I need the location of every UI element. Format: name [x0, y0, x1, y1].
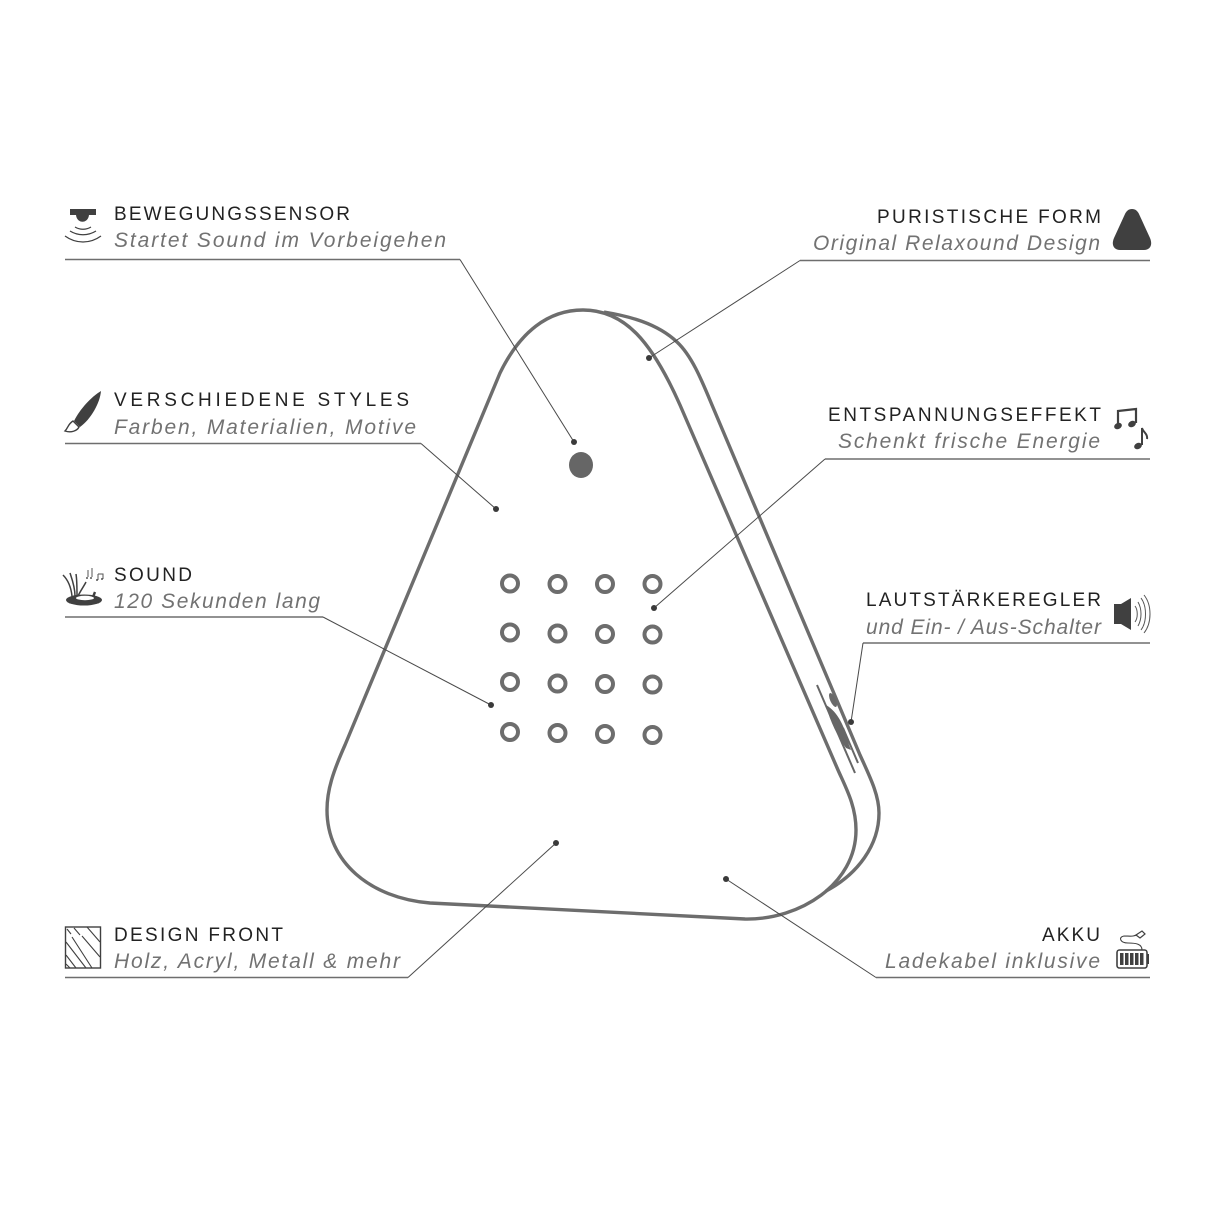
speaker holes [502, 576, 660, 743]
description: Schenkt frische Energie [838, 430, 1100, 453]
description: und Ein- / Aus-Schalter [866, 616, 1102, 639]
heading: VERSCHIEDENE STYLES [114, 390, 409, 411]
heading: DESIGN FRONT [114, 925, 283, 946]
device illustration [327, 310, 879, 919]
heading: PURISTISCHE FORM [877, 207, 1101, 228]
heading: LAUTSTÄRKEREGLER [866, 590, 1101, 611]
icon: hatched material square [66, 927, 100, 968]
volume control [817, 685, 858, 773]
heading: BEWEGUNGSSENSOR [114, 204, 350, 225]
device back edge [604, 312, 879, 891]
icon: speaker [1114, 595, 1150, 633]
leader line [65, 442, 421, 444]
icon: triangle shape [1113, 209, 1151, 250]
icon: music notes [1113, 409, 1147, 450]
icon: pond with record and notes [63, 568, 103, 606]
heading: SOUND [114, 565, 192, 586]
callout: Puristische Form [646, 207, 1151, 361]
leader line [876, 976, 1150, 978]
motion sensor window [569, 452, 593, 478]
leader line [800, 260, 1150, 262]
icon: paint brush [65, 391, 101, 432]
icon: battery with charging cable [1117, 931, 1149, 968]
leader line [825, 458, 1150, 460]
callout: Lautstärkeregler [848, 590, 1150, 725]
icon: motion sensor [65, 209, 101, 242]
leader line [65, 258, 460, 260]
callout: Sound [63, 565, 494, 708]
callout: Bewegungssensor [65, 204, 577, 445]
description: Holz, Acryl, Metall & mehr [114, 950, 401, 973]
leader line [65, 976, 408, 978]
heading: AKKU [1042, 925, 1100, 946]
callout: Entspannungseffekt [651, 405, 1150, 611]
description: 120 Sekunden lang [114, 590, 320, 613]
leader line [863, 642, 1150, 644]
description: Startet Sound im Vorbeigehen [114, 229, 446, 252]
callout: Verschiedene Styles [65, 390, 499, 512]
description: Ladekabel inklusive [885, 950, 1100, 973]
callout: Design Front [65, 840, 559, 978]
description: Farben, Materialien, Motive [114, 416, 416, 439]
callout: Akku [723, 876, 1150, 978]
device front outline [327, 310, 856, 919]
description: Original Relaxound Design [813, 232, 1100, 255]
heading: ENTSPANNUNGSEFFEKT [828, 405, 1101, 426]
leader line [65, 616, 323, 618]
